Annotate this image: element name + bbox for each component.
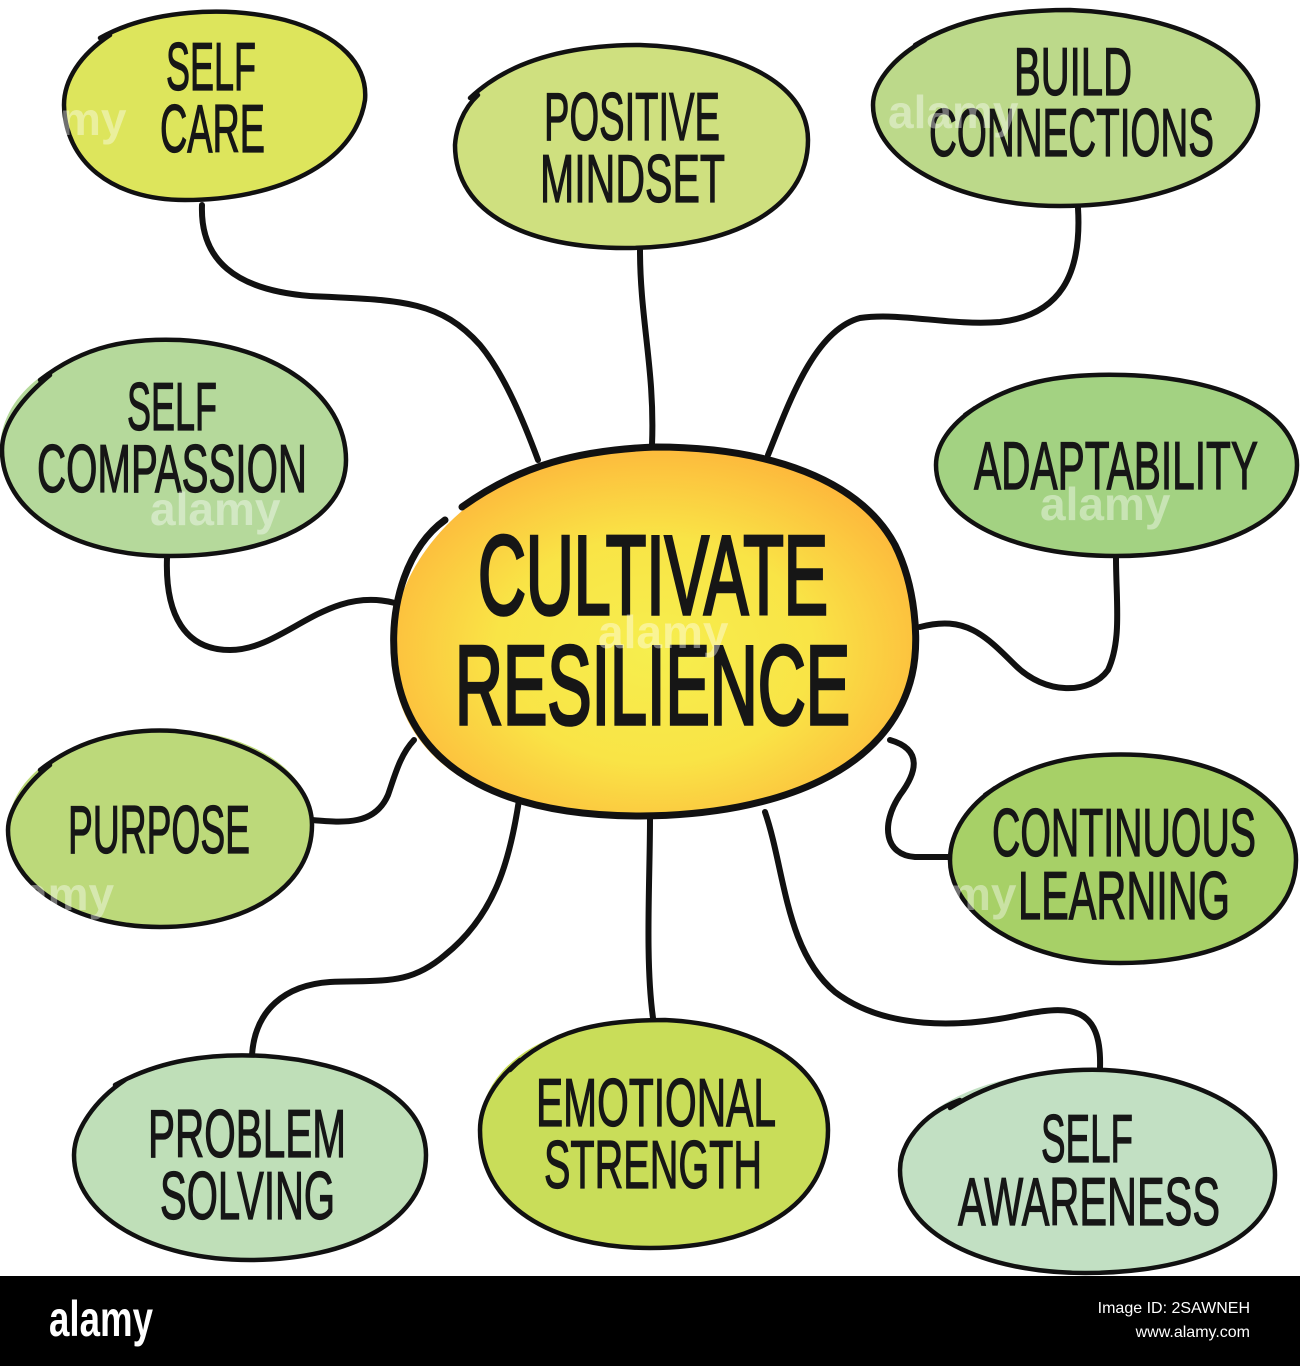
node: self care: SELF [166,29,256,105]
node: purpose [8,730,312,927]
node: self compassion: COMPASSION [37,431,307,507]
node: self care: CARE [160,91,265,167]
node: purpose: PURPOSE [68,792,250,868]
central title: RESILIENCE [455,623,850,748]
node: emotional strength: STRENGTH [544,1127,762,1203]
stock photo watermarks: my [60,93,127,145]
footer image id: Image ID: 2SAWNEH [1098,1300,1250,1317]
footer bar [0,1276,1300,1366]
node: adaptability [936,375,1297,556]
node: self awareness [900,1070,1275,1273]
stock photo watermarks: amy [22,868,114,920]
node: self compassion: SELF [127,369,217,445]
node: build connections: BUILD [1014,34,1132,110]
node: problem solving [74,1055,426,1260]
node: positive mindset: MINDSET [540,141,725,217]
node: problem solving: SOLVING [160,1158,335,1234]
stock photo watermarks: alamy [598,606,729,658]
node: continuous learning [950,754,1296,963]
central title: CULTIVATE [478,513,828,638]
node: self awareness: SELF [1041,1101,1133,1177]
central node: cultivate resilience [392,445,917,818]
footer url: www.alamy.com [1135,1324,1250,1341]
node: self compassion [0,340,346,556]
stock photo watermarks: my [950,868,1017,920]
node: positive mindset [455,45,808,248]
stock photo watermarks [22,86,1171,920]
footer logo: alamy [49,1291,153,1347]
node: self care [63,10,365,200]
stock photo watermarks: alamy [150,483,281,535]
node: problem solving: PROBLEM [148,1096,346,1172]
node: emotional strength [480,1020,828,1248]
node: positive mindset: POSITIVE [544,79,720,155]
node: build connections [873,10,1258,206]
node: emotional strength: EMOTIONAL [536,1065,776,1141]
connector lines [167,205,1117,1068]
stock photo watermarks: alamy [1040,478,1171,530]
central title [455,513,850,748]
stock photo watermarks: alamy [888,86,1019,138]
